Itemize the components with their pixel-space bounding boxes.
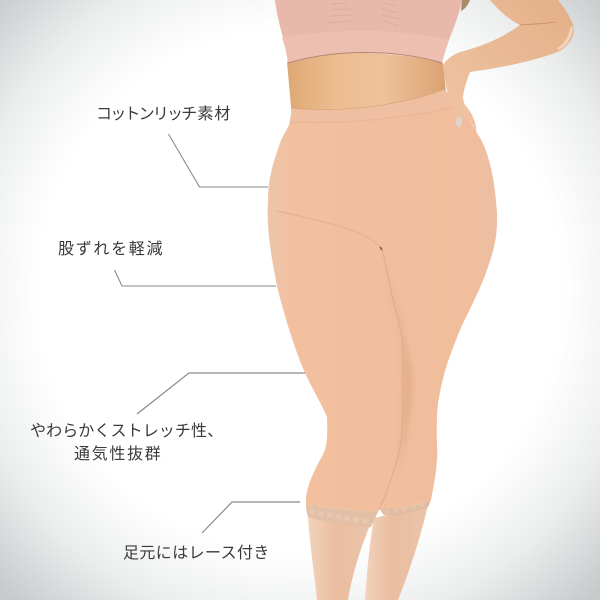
callout line: lace hem [202,502,300,533]
lace hem [306,500,431,527]
inner leg line [379,249,403,510]
label: cotton-rich material: コットンリッチ素材 [96,106,231,123]
arm and hand [443,0,574,132]
label: soft stretch and breathable: 通気性抜群 [74,446,163,463]
label: soft stretch and breathable: やわらかくストレッチ性、 [30,423,223,440]
arm crease [520,22,555,25]
bra top [275,0,462,63]
figure [268,0,574,600]
elbow highlight [558,27,572,49]
label: soft stretch and breathable [30,422,223,463]
callout line: soft stretch [137,373,305,414]
leggings [268,89,497,512]
calves [308,515,370,600]
callout line: cotton-rich material [168,134,268,187]
hair [461,0,470,11]
label: reduces chafing: 股ずれを軽減 [58,241,164,258]
crease [277,211,382,249]
inner leg shadow [384,255,413,480]
nail [456,117,462,127]
label: lace at the hem: 足元にはレース付き [123,545,270,562]
callout line: reduces chafing [114,270,276,286]
waistband [290,89,454,123]
bare midriff [287,53,447,118]
